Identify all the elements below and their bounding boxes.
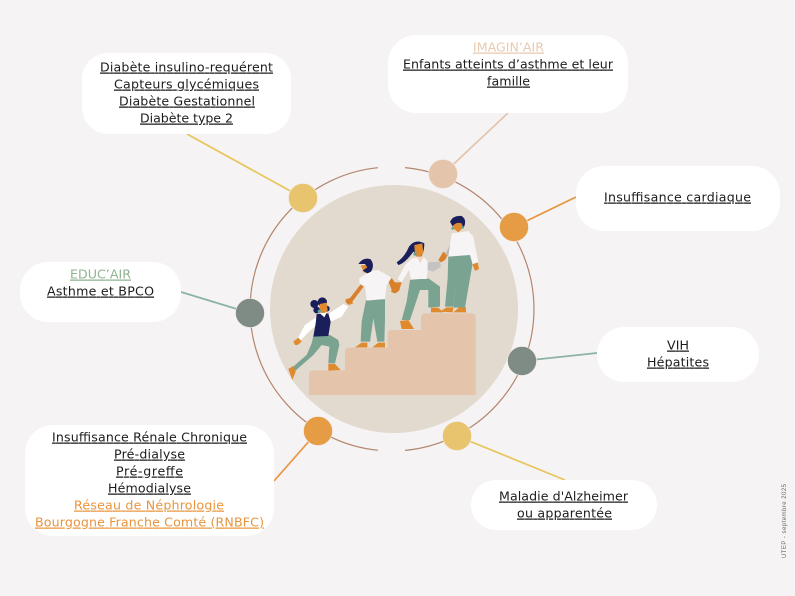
panel: EDUC'AIR: EDUC’AIR: [70, 266, 131, 282]
person 1: [288, 297, 353, 380]
panel: EDUC'AIR: Asthme et BPCO: [47, 284, 154, 298]
panel: VIH hépatites: Hépatites: [647, 354, 709, 370]
panel: insuffisance rénale: Bourgogne Franche Comté (RNBFC): [35, 514, 264, 530]
panel: VIH hépatites: [597, 327, 759, 382]
node dots: [236, 160, 536, 450]
person 3: [391, 241, 448, 329]
panel: Alzheimer: [471, 480, 657, 530]
panel: diabète: Diabète Gestationnel: [119, 94, 255, 108]
panel: diabète: Diabète type 2: [140, 110, 233, 126]
panel: diabète: [82, 53, 291, 134]
panel: IMAGIN'AIR: Enfants atteints d’asthme et leur: [403, 56, 614, 72]
panel: diabète: Capteurs glycémiques: [114, 76, 259, 92]
panel: insuffisance cardiaque: Insuffisance cardiaque: [604, 190, 751, 204]
panel: insuffisance rénale: Insuffisance Rénale Chronique: [52, 430, 247, 444]
ring arcs: [250, 168, 534, 450]
person 2: [345, 259, 399, 347]
panel: IMAGIN'AIR: famille: [487, 74, 530, 88]
panel: VIH hépatites: VIH: [667, 338, 689, 352]
panel: insuffisance cardiaque: [576, 166, 780, 231]
stairs: [309, 313, 476, 395]
panel: diabète: Diabète insulino-requérent: [100, 60, 273, 74]
central disc: [270, 185, 518, 433]
illustration: people climbing stairs: [288, 216, 479, 395]
panel: insuffisance rénale: Pré-dialyse: [114, 446, 185, 462]
connector lines: [181, 113, 597, 481]
panel: Alzheimer: Maladie d'Alzheimer: [499, 488, 629, 504]
panel: insuffisance rénale: Pré-greffe: [116, 464, 183, 478]
panel: Alzheimer: ou apparentée: [517, 506, 612, 520]
panel: EDUC'AIR: [20, 262, 181, 322]
panel: insuffisance rénale: Hémodialyse: [108, 480, 191, 496]
panel: insuffisance rénale: [25, 425, 274, 536]
credit text: UTEP - septembre 2025: [782, 483, 788, 558]
panel: IMAGIN'AIR: IMAGIN’AIR: [473, 40, 544, 54]
panel: insuffisance rénale: Réseau de Néphrologie: [74, 498, 224, 512]
person 4: [440, 216, 479, 312]
panel: IMAGIN'AIR: [388, 35, 628, 113]
